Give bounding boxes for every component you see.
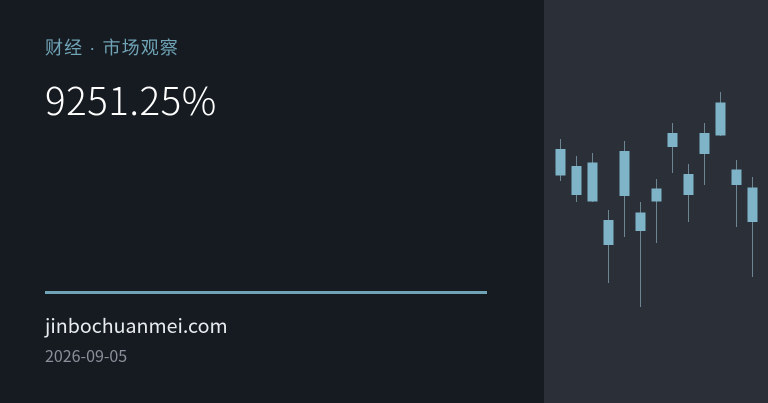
category heading: 财经 · 市场观察 <box>45 38 179 58</box>
domain name: jinbochuanmei.com <box>45 310 228 339</box>
panel: left text panel <box>0 0 544 403</box>
panel: candlestick chart panel <box>544 0 768 403</box>
date: 2026-09-05 <box>45 343 127 367</box>
headline value: 9251.25% <box>45 71 217 127</box>
candlestick chart <box>556 92 758 307</box>
accent rule <box>45 291 487 294</box>
